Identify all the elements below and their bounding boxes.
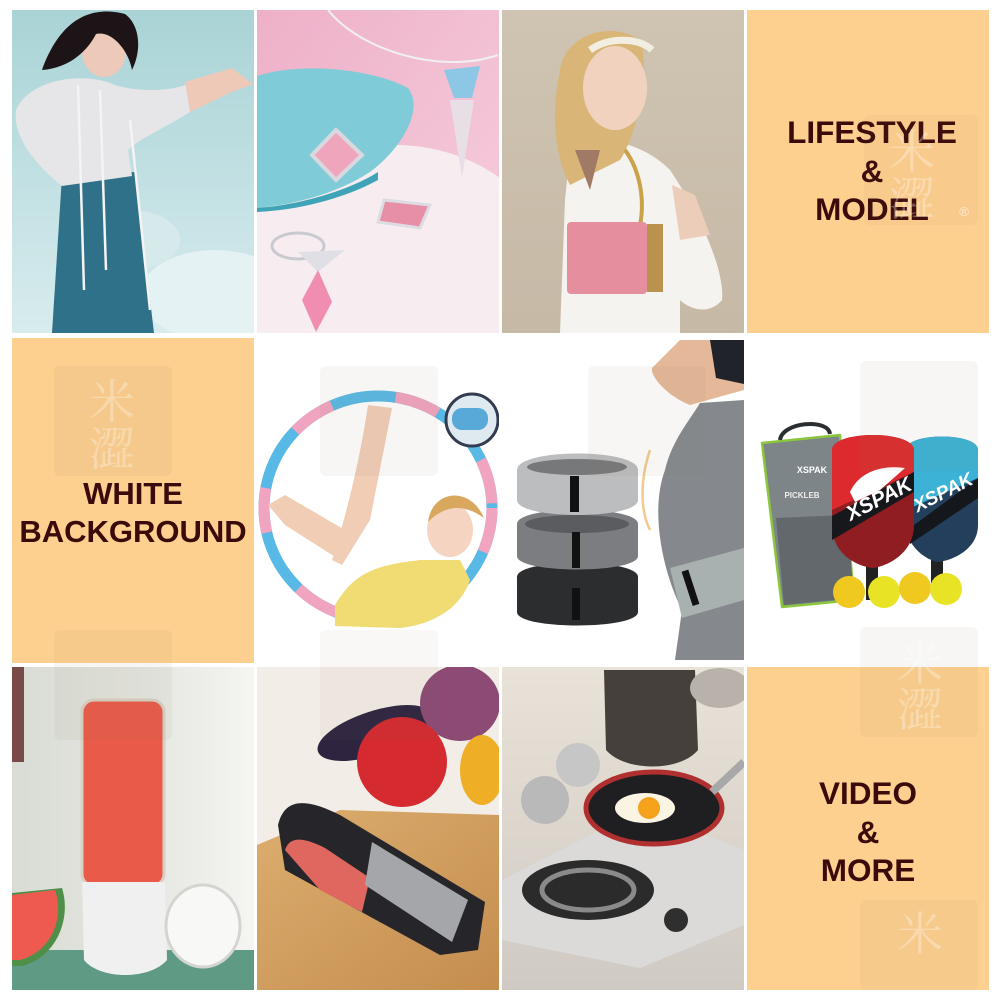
watermarks: 米 bbox=[889, 116, 935, 182]
watermarks: 澀 bbox=[89, 413, 135, 479]
bow ring with pink drop bbox=[272, 233, 324, 259]
panel: video and more label bbox=[747, 667, 989, 990]
watermarks: 米 bbox=[897, 898, 943, 964]
panel: jewellery rings on pink bbox=[257, 10, 499, 333]
heading: lifestyle and model: & bbox=[861, 153, 883, 189]
panel: pickleball paddles and bag bbox=[747, 338, 989, 663]
watermarks: ® bbox=[959, 204, 969, 219]
heading: video and more bbox=[819, 775, 917, 888]
watermarks: 米 bbox=[89, 366, 135, 432]
heading: lifestyle and model: LIFESTYLE bbox=[787, 114, 957, 150]
black band bbox=[517, 563, 638, 626]
panel: white background label bbox=[12, 338, 254, 663]
blue crystal pendant bbox=[444, 66, 480, 98]
panel: lifestyle model with white blouse bbox=[12, 10, 254, 333]
paddle bag bbox=[762, 424, 854, 607]
heading: white background: BACKGROUND bbox=[19, 514, 247, 549]
heading: white background bbox=[19, 476, 247, 549]
panel: model with pink handbag bbox=[502, 10, 744, 333]
blue paddle bbox=[906, 436, 978, 585]
paddle bag: XSPAK bbox=[797, 465, 828, 475]
pickleballs bbox=[833, 572, 962, 608]
heading: white background: WHITE bbox=[83, 476, 183, 511]
red paddle bbox=[832, 435, 917, 600]
panel: lifestyle and model label bbox=[747, 10, 989, 333]
paddle bag: PICKLEB bbox=[784, 491, 820, 500]
heading: video and more: VIDEO bbox=[819, 775, 917, 811]
pink emerald ring bbox=[378, 200, 430, 228]
watermarks: 米 bbox=[897, 628, 943, 694]
heading: video and more: & bbox=[857, 814, 879, 850]
blender bbox=[82, 700, 164, 886]
panel: portable blender with watermelon bbox=[12, 667, 254, 990]
panel: knife sharpener with vegetables bbox=[257, 665, 504, 990]
heading: lifestyle and model: MODEL bbox=[815, 191, 929, 227]
light grey band bbox=[517, 454, 638, 515]
panel: girl inside hula hoop bbox=[258, 390, 499, 628]
panel: hot plate with frying pan bbox=[502, 667, 750, 990]
watermelon bbox=[12, 888, 65, 966]
blue paddle: XSPAK bbox=[909, 469, 978, 517]
red paddle: XSPAK bbox=[841, 472, 917, 526]
panel: resistance bands and legs bbox=[502, 338, 744, 663]
blender lid bbox=[166, 885, 240, 967]
watermarks: 澀 bbox=[897, 674, 943, 740]
watermarks: 澀 bbox=[889, 163, 935, 229]
heading: lifestyle and model bbox=[787, 114, 957, 227]
heading: video and more: MORE bbox=[821, 852, 915, 888]
grey band bbox=[517, 510, 638, 570]
pink square gem ring bbox=[312, 130, 362, 180]
